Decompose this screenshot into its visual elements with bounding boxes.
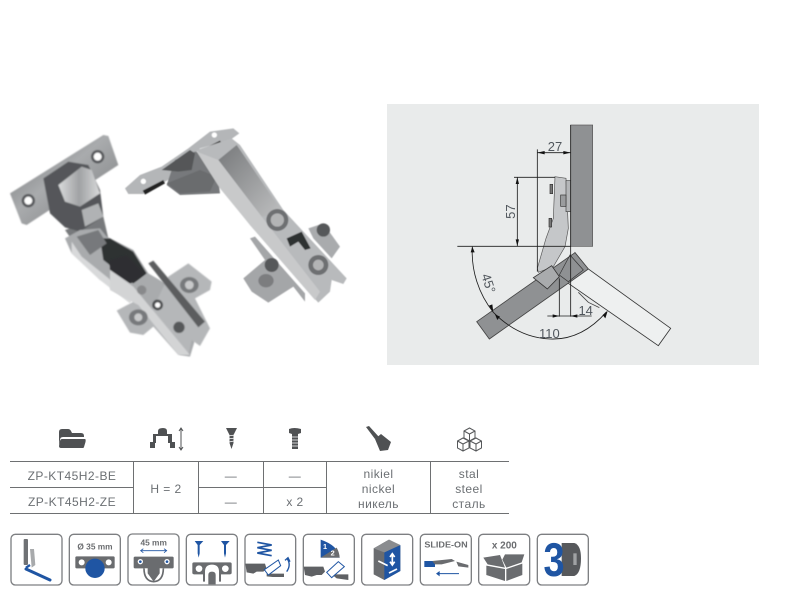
icon: mounting plate height — [150, 428, 183, 450]
photo: right hinge — [125, 128, 347, 303]
icon: wood screw — [226, 428, 237, 449]
arrowheads — [471, 151, 608, 320]
dimension labels: 45° — [478, 272, 499, 295]
icon: folder — [59, 429, 86, 448]
table: text cells: steel — [455, 482, 483, 496]
dimension labels: 27 — [548, 139, 562, 154]
drawing: open door outline — [568, 253, 671, 346]
icon: 45 mm hole spacing: 45 mm — [140, 538, 167, 548]
drawing: hinge body — [533, 177, 599, 308]
table: text cells: — — [225, 469, 237, 483]
photo: left hinge mounting plate — [110, 255, 212, 355]
dimension labels: 14 — [578, 303, 593, 318]
icon: cubes — [458, 428, 482, 451]
icon: soft close spring — [245, 534, 296, 585]
table: text cells — [28, 467, 486, 511]
table: text cells: — — [225, 495, 237, 509]
icon: 3-way adjustment — [362, 534, 413, 585]
table: text cells: — — [289, 469, 301, 483]
table: text cells: ZP-KT45H2-BE — [28, 469, 116, 483]
dimension labels — [478, 139, 593, 341]
icon: two-stage opening: 1 — [323, 542, 327, 551]
icon: 45 degree door angle — [11, 534, 62, 585]
icon: box x 200 — [479, 534, 530, 585]
table: text cells: сталь — [452, 497, 486, 511]
table: text cells: никель — [358, 497, 399, 511]
panel: technical drawing — [387, 104, 759, 365]
icon: slide-on — [420, 534, 471, 585]
photo: left hinge — [10, 135, 195, 357]
icon: machine screw — [289, 428, 301, 449]
table: header icons — [59, 426, 482, 451]
table: text cells: stal — [459, 467, 479, 481]
table: text cells: nikiel — [363, 467, 394, 481]
dimension labels: 57 — [503, 204, 518, 219]
drawing: wall panel — [571, 125, 593, 246]
table: text cells: ZP-KT45H2-ZE — [28, 495, 116, 509]
drawing: closed door — [477, 253, 588, 339]
table: text cells: x 2 — [286, 495, 304, 509]
dimension labels: 110 — [539, 326, 560, 341]
table: grid lines — [10, 462, 509, 514]
icon row — [11, 534, 588, 587]
icon: 35 mm cup — [69, 534, 120, 585]
icon: 35 mm cup: Ø 35 mm — [77, 542, 113, 552]
icon: slide-on: SLIDE-ON — [424, 540, 468, 550]
icon: two-stage opening: 2 — [331, 549, 335, 558]
icon: box x 200: x 200 — [492, 540, 517, 551]
icon: 3D adjustment — [537, 534, 588, 587]
icon: screw fixing — [186, 534, 237, 585]
icon: two-stage opening — [303, 534, 354, 585]
table: text cells: nickel — [362, 482, 395, 496]
icon: 45 mm hole spacing — [128, 534, 179, 585]
icon: 3D adjustment: 3 — [543, 534, 565, 587]
icon: paint brush — [366, 426, 391, 451]
dimension lines — [457, 125, 607, 339]
table: text cells: H = 2 — [150, 482, 182, 496]
